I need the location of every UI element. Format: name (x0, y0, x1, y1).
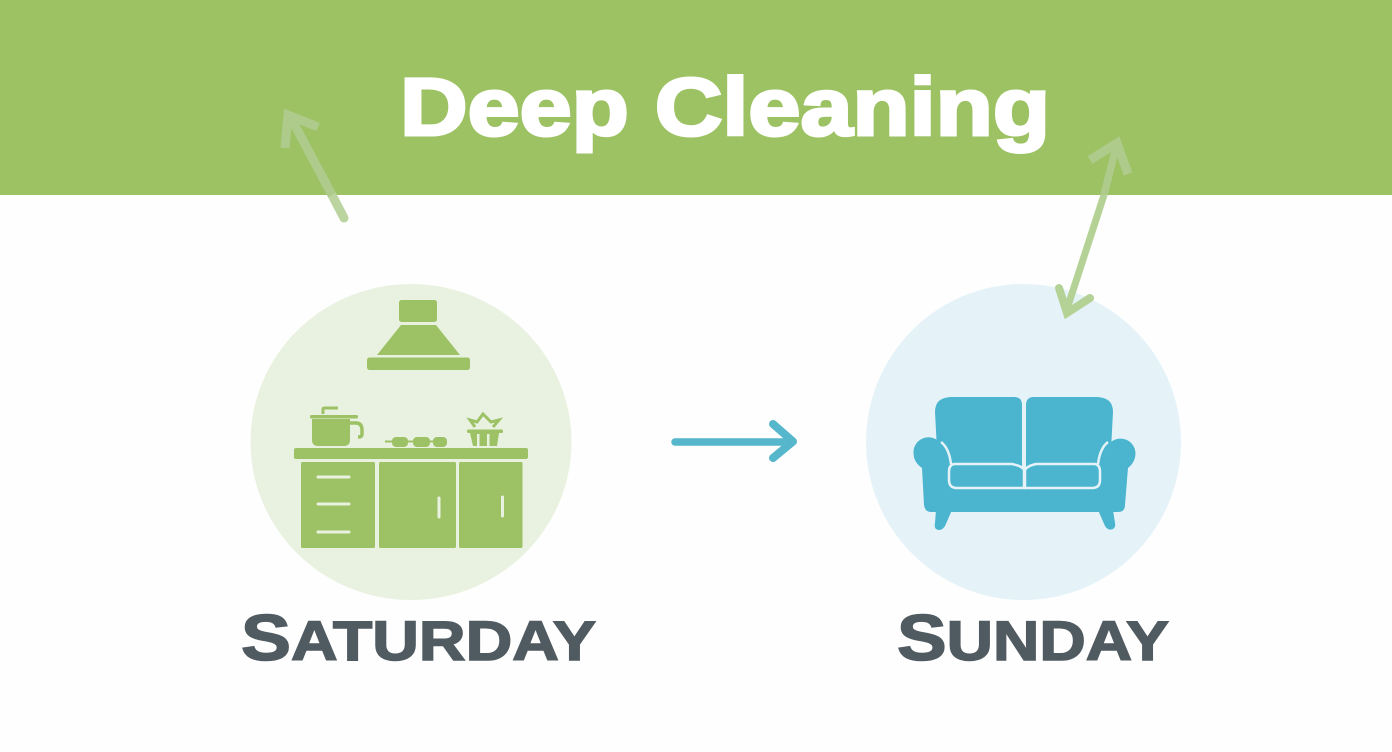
arm outlines (941, 442, 1108, 464)
cabinet handles (318, 477, 502, 532)
cabinet: right door (459, 462, 522, 548)
label: saturday: SATURDAY (241, 601, 596, 674)
title: Deep Cleaning (400, 62, 1050, 153)
arrow: double-headed sunday to header (1059, 143, 1128, 313)
arrow: saturday to sunday (675, 424, 793, 458)
stove burners (385, 437, 447, 447)
sofa base and arms (913, 437, 1136, 512)
arrow: up-left from header (285, 115, 344, 218)
pot (310, 408, 362, 446)
countertop (294, 448, 528, 459)
sofa back (935, 397, 1022, 470)
sofa legs (935, 510, 952, 530)
label: sunday: SUNDAY (897, 601, 1169, 674)
icon: kitchen (294, 300, 528, 548)
header band (0, 0, 1392, 195)
cabinet: drawers (301, 462, 375, 548)
panel: saturday circle (250, 284, 572, 600)
panel: sunday circle (866, 284, 1181, 600)
seat cushions (949, 464, 1024, 488)
range hood (367, 300, 470, 370)
cabinet: middle door (379, 462, 456, 548)
basket (467, 414, 503, 446)
icon: sofa (913, 397, 1136, 530)
